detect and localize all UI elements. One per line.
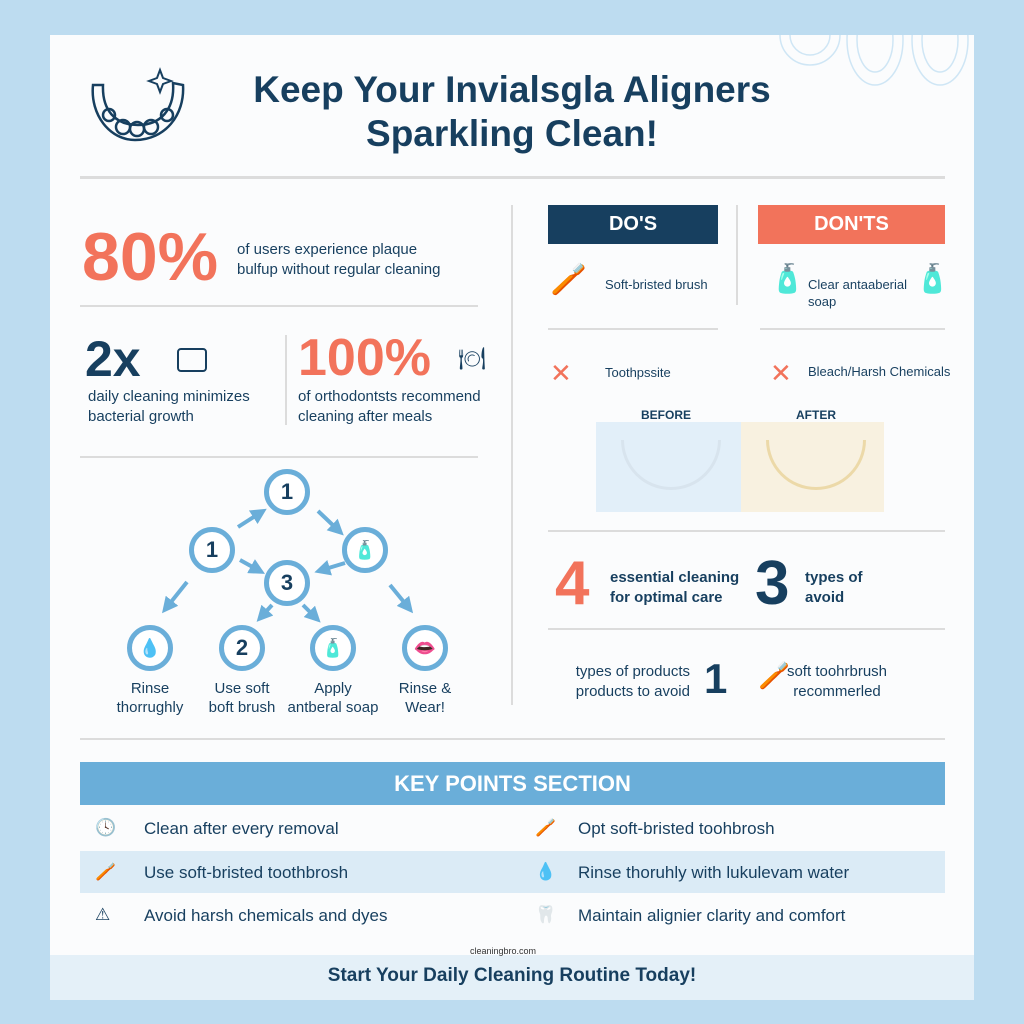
do items: Soft-bristed brush: [605, 277, 708, 292]
before/after: BEFORE: [641, 408, 691, 422]
flow chart: Wear!: [405, 699, 445, 716]
watermark: cleaningbro.com: [470, 946, 536, 956]
flow chart: [116, 469, 452, 716]
bottom stats: types of products products to avoid: [576, 663, 690, 700]
stat: 80%: [82, 219, 440, 295]
key points list: Avoid harsh chemicals and dyes: [144, 906, 388, 925]
do items: 🪥: [550, 263, 587, 296]
do items: [550, 262, 708, 388]
stat: 80%: 80%: [82, 219, 218, 295]
bottom stats: 🪥: [758, 660, 790, 690]
footer band: [50, 955, 974, 1000]
flow chart: 👄: [414, 638, 436, 658]
stats 4 and 3: for optimal care: [610, 589, 723, 606]
stats 4 and 3: 4: [555, 549, 589, 618]
do's header: DO'S: [609, 213, 657, 235]
title: Keep Your Invialsgla Aligners: [253, 69, 771, 110]
flow chart: 🧴: [354, 540, 376, 560]
key points list: 🪥: [95, 862, 116, 881]
flow chart: thorrughly: [117, 699, 183, 716]
bottom stats: [576, 655, 887, 702]
key points list: Maintain alignier clarity and comfort: [578, 906, 845, 925]
stats 4 and 3: [555, 549, 863, 618]
key points list: 🕓: [95, 818, 116, 837]
flow chart: 2: [236, 635, 248, 660]
key points list: Opt soft-bristed toohbrosh: [578, 819, 775, 838]
bottom stats: 1: [704, 655, 727, 702]
bottom stats: soft toohrbrush recommerled: [787, 663, 887, 700]
flow chart: 1: [281, 479, 293, 504]
key points list: [80, 818, 945, 925]
don't items: ✕: [770, 358, 792, 388]
stats 4 and 3: types of: [805, 569, 863, 586]
don't items: [770, 263, 950, 388]
key points list: 🦷: [535, 905, 556, 924]
don'ts header: [758, 205, 945, 244]
flow chart: Apply: [314, 680, 352, 697]
flow chart: 💧: [139, 638, 161, 658]
flow chart: antberal soap: [288, 699, 378, 716]
do items: Toothpssite: [605, 365, 671, 380]
icon: aligner: [91, 67, 184, 142]
key points list: Use soft-bristed toothbrosh: [144, 863, 348, 882]
stats 4 and 3: avoid: [805, 589, 844, 606]
key points list: Rinse thoruhly with lukulevam water: [578, 863, 849, 882]
don't items: 🧴: [770, 263, 805, 294]
stat: 2x: 2x: [85, 331, 141, 387]
do items: ✕: [550, 358, 572, 388]
flow chart: boft brush: [209, 699, 275, 716]
decorative rings: [779, 35, 969, 86]
stat: 100%: 🍽: [458, 346, 486, 371]
stat: 80%: of users experience plaque bulfup without regular cleaning: [237, 241, 440, 278]
stat: 100%: 100%: [298, 329, 431, 387]
flow chart: 1: [206, 537, 218, 562]
flow chart: Rinse: [131, 680, 169, 697]
key points list: Clean after every removal: [144, 819, 339, 838]
flow chart: 🧴: [322, 638, 344, 658]
key points header: KEY POINTS SECTION: [394, 771, 631, 796]
stat: 100%: of orthodontsts recommend cleaning after meals: [298, 388, 481, 425]
don't items: Bleach/Harsh Chemicals: [808, 364, 950, 379]
key points list: 🪥: [535, 818, 556, 837]
don't items: Clear antaaberial soap: [808, 277, 907, 309]
do's header: [548, 205, 718, 244]
before/after: [596, 408, 884, 512]
before/after: AFTER: [796, 408, 836, 422]
stat: 100%: [298, 329, 486, 425]
key points list: 💧: [535, 862, 556, 881]
key points header: [80, 762, 945, 805]
title: Sparkling Clean!: [366, 113, 658, 154]
flow chart: 3: [281, 570, 293, 595]
stat: 2x: [85, 331, 250, 425]
stats 4 and 3: 3: [755, 549, 789, 618]
don't items: 🧴: [915, 263, 950, 294]
key points list: ⚠: [95, 905, 110, 924]
flow chart: Use soft: [214, 680, 270, 697]
stats 4 and 3: essential cleaning: [610, 569, 739, 586]
flow chart: Rinse &: [399, 680, 451, 697]
title: [253, 69, 771, 154]
don'ts header: DON'TS: [814, 213, 889, 235]
stat: 2x: daily cleaning minimizes bacterial growth: [88, 388, 250, 425]
footer text: Start Your Daily Cleaning Routine Today!: [328, 965, 696, 986]
